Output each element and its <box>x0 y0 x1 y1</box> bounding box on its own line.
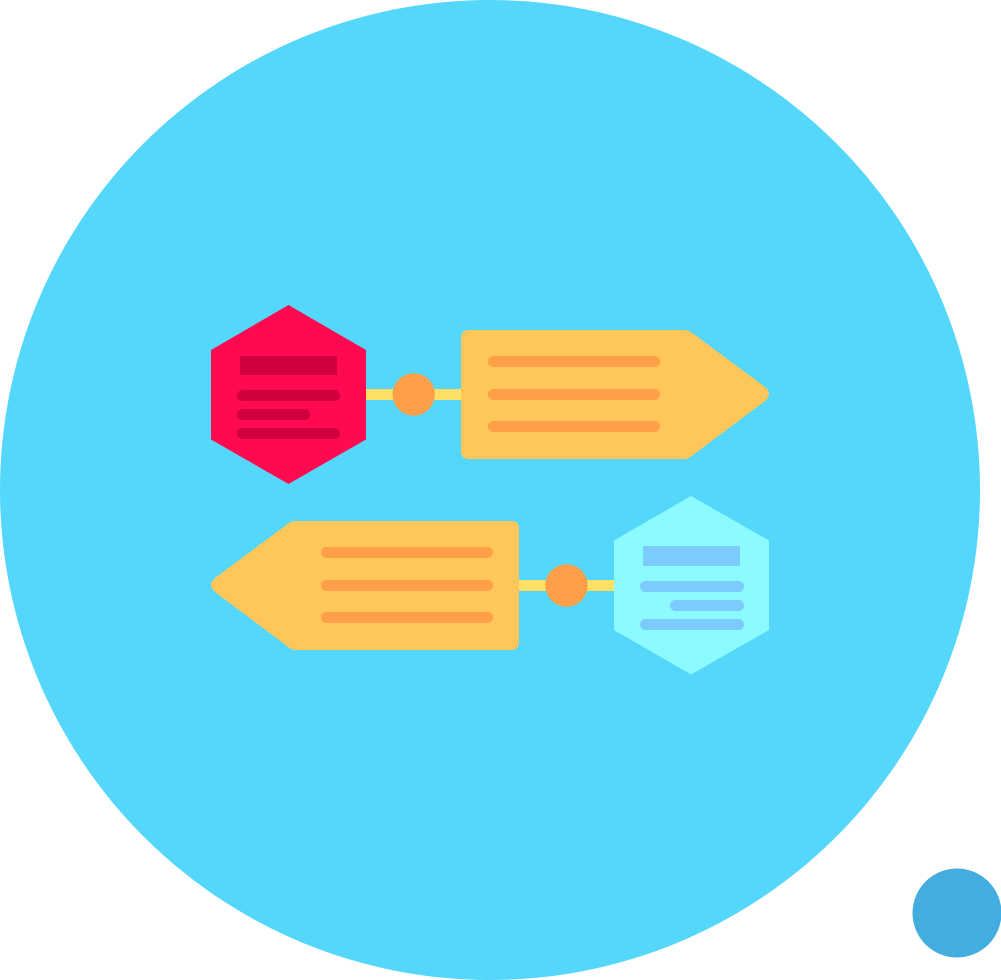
light blue hexagon with text lines <box>614 496 769 674</box>
bottom arrow label pointing left <box>211 521 519 650</box>
top row connector <box>360 373 468 416</box>
red hexagon with text lines <box>211 305 366 484</box>
bottom row connector <box>512 564 620 607</box>
top arrow label pointing right <box>461 330 769 459</box>
small corner circle <box>912 868 1001 958</box>
